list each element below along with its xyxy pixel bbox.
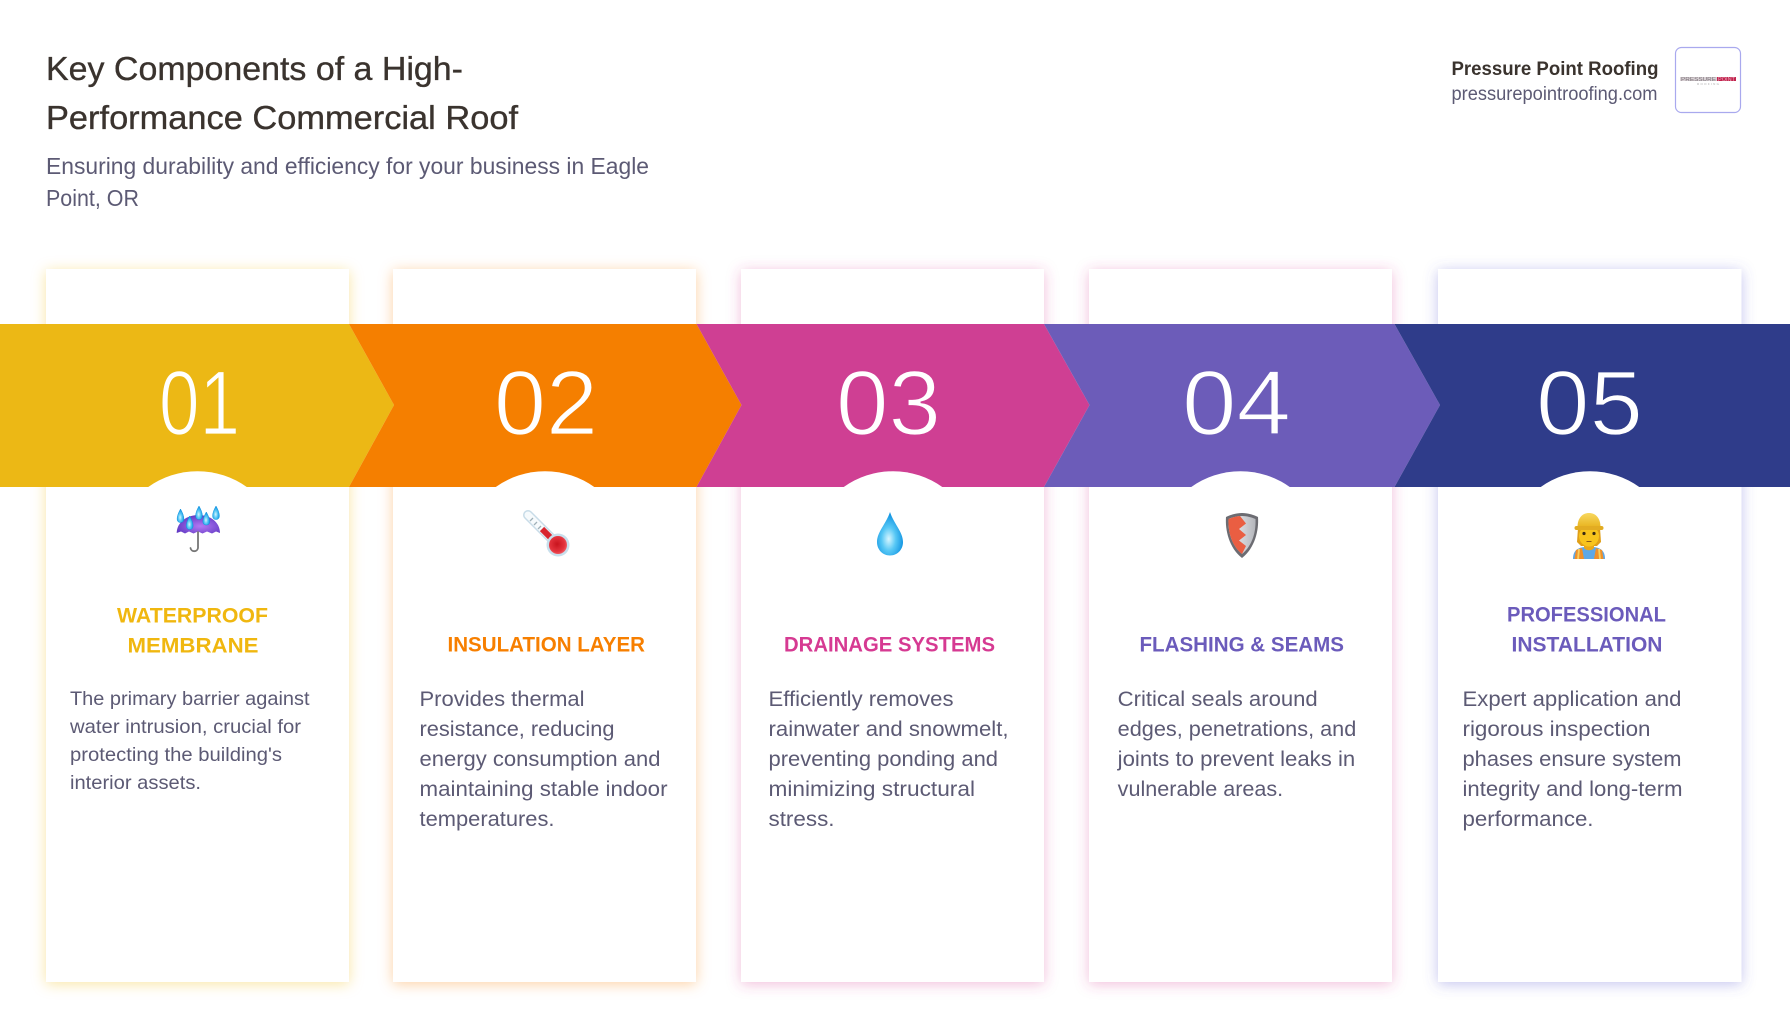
heading: DRAINAGE SYSTEMS xyxy=(784,632,995,656)
body text: vulnerable areas. xyxy=(1118,778,1283,801)
chevron 01: 01 xyxy=(159,352,240,454)
body text: joints to prevent leaks in xyxy=(1117,748,1355,771)
body text: resistance, reducing xyxy=(420,718,614,741)
icon: umbrella with rain xyxy=(177,506,220,551)
icon: water drop xyxy=(877,512,903,556)
heading xyxy=(117,604,268,658)
body text: Critical seals around xyxy=(1118,688,1318,711)
heading: FLASHING & SEAMS xyxy=(1140,632,1344,656)
body text: stress. xyxy=(768,808,834,831)
heading: INSULATION LAYER xyxy=(448,632,645,656)
body text: temperatures. xyxy=(420,808,554,831)
subtitle: Point, OR xyxy=(46,185,139,211)
brand name and website xyxy=(1452,58,1658,105)
chevron 05: 05 xyxy=(1536,352,1643,454)
body text: performance. xyxy=(1462,808,1594,831)
logo box: POINT xyxy=(1718,77,1735,83)
heading: MEMBRANE xyxy=(128,634,258,658)
logo box xyxy=(1676,48,1740,112)
body text: minimizing structural xyxy=(768,778,975,801)
chevron 04 xyxy=(1044,324,1440,488)
chevron 05 xyxy=(1394,324,1790,488)
heading: WATERPROOF xyxy=(117,604,268,628)
body text: Efficiently removes xyxy=(768,688,954,711)
panel: insulation layer xyxy=(393,269,696,982)
panel: waterproof membrane xyxy=(46,269,349,982)
title: Key Components of a High- xyxy=(46,51,463,88)
heading: PROFESSIONAL xyxy=(1507,602,1666,626)
body text: integrity and long-term xyxy=(1462,778,1682,801)
heading: INSTALLATION xyxy=(1512,632,1662,656)
subtitle xyxy=(46,153,649,211)
body text xyxy=(420,688,668,831)
body text: maintaining stable indoor xyxy=(420,778,668,801)
icon: thermometer xyxy=(528,515,570,556)
chevron 03 xyxy=(696,324,1090,488)
body text: The primary barrier against xyxy=(70,688,310,710)
body text: rigorous inspection xyxy=(1462,718,1650,741)
body text: preventing ponding and xyxy=(768,748,998,771)
chevron 02 xyxy=(349,324,742,488)
chevron 04: 04 xyxy=(1182,352,1291,454)
subtitle: Ensuring durability and efficiency for your business in Eagle xyxy=(46,153,649,179)
body text: protecting the building's xyxy=(70,744,282,766)
body text: interior assets. xyxy=(70,772,201,794)
body text: Provides thermal xyxy=(420,688,584,711)
body text: edges, penetrations, and xyxy=(1118,718,1356,741)
chevron band xyxy=(0,324,1790,488)
body text xyxy=(1117,688,1356,801)
body text: energy consumption and xyxy=(420,748,660,771)
title: Performance Commercial Roof xyxy=(46,100,519,137)
panel: drainage systems xyxy=(741,269,1044,982)
body text: Expert application and xyxy=(1462,688,1682,711)
icon: construction worker xyxy=(1573,513,1605,559)
title xyxy=(46,51,519,137)
logo box: PRESSURE xyxy=(1681,77,1717,83)
body text: rainwater and snowmelt, xyxy=(768,718,1008,741)
body text xyxy=(768,688,1008,831)
body text: water intrusion, crucial for xyxy=(69,716,302,738)
logo box: ROOFING xyxy=(1697,82,1720,86)
chevron 01 xyxy=(0,324,394,488)
panel: professional installation xyxy=(1438,269,1742,982)
body text xyxy=(69,688,310,794)
brand name and website: Pressure Point Roofing xyxy=(1452,58,1658,80)
chevron 02: 02 xyxy=(494,352,598,454)
brand name and website: pressurepointroofing.com xyxy=(1452,84,1658,105)
body text: phases ensure system xyxy=(1462,748,1682,771)
body text xyxy=(1462,688,1682,831)
panel: flashing and seams xyxy=(1089,269,1392,982)
icon: shield xyxy=(1226,513,1258,558)
heading xyxy=(1507,602,1666,656)
chevron 03: 03 xyxy=(836,352,941,454)
